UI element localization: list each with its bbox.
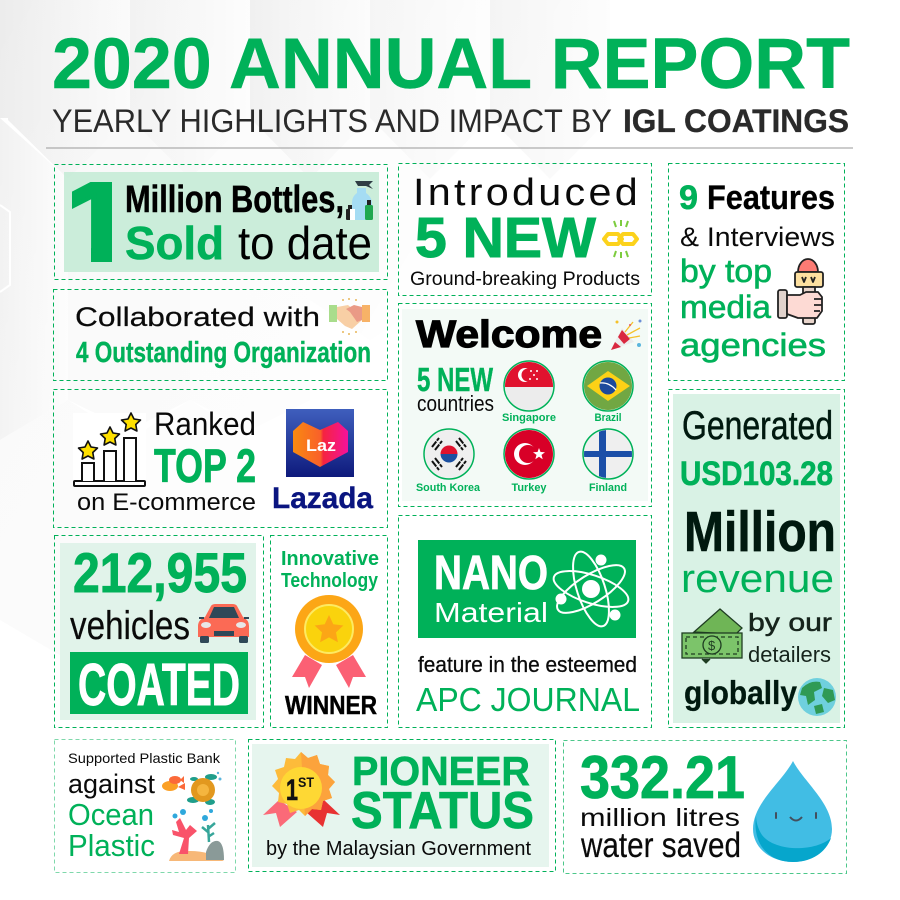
sold to date — [125, 217, 372, 269]
icon: first place badge — [263, 752, 340, 827]
usd amount text: USD103.28 — [680, 455, 833, 493]
icon: water drop — [753, 761, 832, 862]
flag: south korea: South Korea — [416, 482, 481, 494]
welcome text: Welcome — [416, 314, 602, 356]
5 new countries text: countries — [417, 391, 494, 416]
supported text: Supported Plastic Bank — [68, 750, 221, 766]
icon: fish — [162, 776, 185, 791]
by our detailers text — [748, 609, 832, 667]
against text: against — [68, 769, 155, 799]
by top media agencies text: agencies — [680, 327, 826, 363]
panel: nano material — [398, 516, 652, 728]
vehicles text: vehicles — [70, 604, 190, 648]
collaborated text: Collaborated with — [75, 302, 320, 332]
logo: lazada — [272, 409, 373, 515]
sold to date: to date — [238, 217, 372, 269]
nano banner: NANO — [434, 547, 548, 600]
logo: lazada: Laz — [306, 436, 336, 455]
9 features text: Features — [707, 179, 835, 217]
coated banner: COATED — [78, 652, 240, 718]
coated banner — [70, 652, 248, 718]
number 212,955: 212,955 — [73, 541, 247, 604]
flag: singapore: Singapore — [502, 412, 556, 424]
panel: vehicles coated — [54, 536, 264, 728]
million text: Million — [684, 500, 836, 564]
organization text: 4 Outstanding Organization — [76, 337, 371, 369]
panel: water saved — [564, 740, 846, 874]
sold to date: Sold — [125, 217, 224, 269]
panel: features and interviews — [668, 164, 844, 380]
icon: chain link — [604, 220, 637, 258]
introduced text: Introduced — [413, 172, 641, 214]
feature text: feature in the esteemed — [418, 652, 637, 677]
icon: first place badge: 1 — [286, 774, 298, 807]
interviews text: & Interviews — [680, 222, 835, 252]
ocean plastic text: Ocean — [68, 797, 154, 832]
nano banner: Material — [434, 597, 548, 628]
panel: innovative technology winner — [270, 536, 388, 728]
by top media agencies text: by top — [680, 253, 772, 289]
5 new countries text: 5 NEW — [417, 361, 494, 398]
5 new countries text — [417, 361, 494, 416]
globally text: globally — [684, 674, 798, 711]
icon: turtle — [187, 772, 222, 805]
status text: STATUS — [351, 782, 534, 840]
innovative technology text: Innovative — [281, 548, 379, 570]
flag: finland: Finland — [589, 482, 627, 494]
nano banner — [418, 540, 636, 638]
ocean plastic text — [68, 797, 155, 863]
innovative technology text — [281, 548, 379, 592]
panel: ocean plastic — [54, 740, 236, 872]
by the malaysian government text: by the Malaysian Government — [266, 838, 531, 860]
generated text: Generated — [682, 404, 833, 448]
icon: bottles — [346, 181, 373, 220]
ranked text: Ranked — [154, 406, 256, 442]
icon: party popper — [611, 320, 642, 350]
winner text: WINNER — [285, 690, 377, 720]
logo: lazada: Lazada — [272, 482, 373, 515]
panel: collaborated — [54, 290, 388, 380]
top 2 text: TOP 2 — [154, 439, 256, 492]
5 new text: 5 NEW — [415, 206, 596, 270]
innovative technology text: Technology — [281, 570, 379, 592]
million litres text: million litres — [580, 804, 740, 832]
number 332.21: 332.21 — [580, 744, 745, 811]
panel: pioneer status — [248, 740, 556, 872]
icon: bar chart with stars — [73, 413, 146, 487]
flag: brazil: Brazil — [594, 412, 622, 424]
subtitle: YEARLY HIGHLIGHTS AND IMPACT BY — [52, 103, 612, 139]
flag: turkey — [504, 429, 554, 494]
icon: coral reef — [169, 809, 224, 861]
by our detailers text: detailers — [748, 642, 831, 667]
by top media agencies text — [680, 253, 826, 363]
flag: brazil — [583, 361, 633, 424]
icon: globe — [798, 678, 836, 716]
flag: turkey: Turkey — [512, 482, 547, 494]
panel: ranked top 2 — [54, 390, 388, 528]
icon: microphone in hand — [778, 259, 823, 324]
water saved text: water saved — [580, 826, 741, 865]
icon: car — [198, 604, 249, 643]
icon: handshake — [329, 298, 370, 335]
by top media agencies text: media — [680, 289, 771, 325]
icon: atom — [550, 548, 632, 630]
title: 2020 ANNUAL REPORT — [52, 25, 850, 104]
panel: 1 million bottles — [54, 164, 388, 280]
ocean plastic text: Plastic — [68, 828, 155, 863]
pioneer text: PIONEER — [352, 748, 530, 794]
icon: medal — [292, 595, 366, 688]
panel: welcome 5 new countries — [398, 304, 652, 506]
flag: finland — [583, 429, 633, 494]
on e-commerce text: on E-commerce — [77, 489, 256, 516]
9 features text: 9 — [679, 179, 698, 217]
by our detailers text: by our — [748, 609, 832, 637]
panel: introduced 5 new — [398, 164, 652, 296]
icon: money — [682, 609, 742, 663]
revenue text: revenue — [681, 557, 834, 601]
big number 1: 1 — [60, 157, 140, 287]
icon: first place badge: ST — [298, 774, 314, 790]
ground-breaking text: Ground-breaking Products — [410, 269, 640, 290]
flag: singapore — [502, 361, 556, 424]
apc journal text: APC JOURNAL — [416, 681, 640, 718]
flag: south korea — [416, 429, 481, 494]
icon: money: $ — [708, 638, 716, 653]
subtitle: IGL COATINGS — [623, 103, 849, 139]
heading: million bottles: Million Bottles, — [125, 179, 344, 221]
panel: revenue — [668, 390, 844, 728]
